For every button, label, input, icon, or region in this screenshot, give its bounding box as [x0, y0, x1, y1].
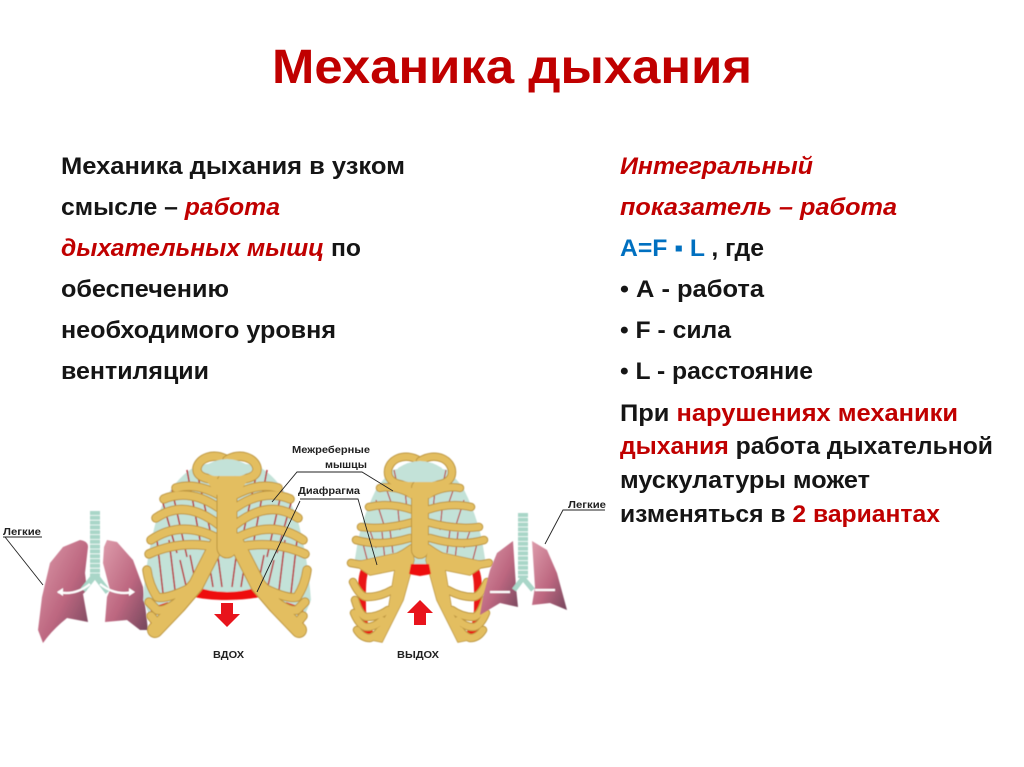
label: intercostal muscles: мышцы: [325, 460, 367, 471]
text block: integral indicator and formula: [620, 153, 897, 385]
leader lines: [3, 472, 605, 592]
label: inhale: ВДОХ: [213, 650, 244, 661]
arrow: diaphragm moves up: [407, 600, 433, 625]
label: lungs left: Легкие: [3, 527, 41, 538]
illustration: inhale lungs: [38, 511, 148, 643]
text block: integral indicator and formula: • F - сила: [620, 317, 732, 344]
text block: left definition: обеспечению: [61, 276, 229, 303]
text block: mechanics disorders: [620, 400, 993, 528]
text block: mechanics disorders: дыхания работа дыхательной: [620, 433, 993, 460]
text block: integral indicator and formula: A=F ▪ L , где: [620, 235, 764, 262]
illustration: inhale rib cage: [143, 456, 311, 630]
text block: integral indicator and formula: Интегральный: [620, 153, 813, 180]
text block: left definition: дыхательных мышц по: [61, 235, 361, 262]
text block: integral indicator and formula: • А - работа: [620, 276, 765, 303]
label: lungs right: Легкие: [568, 500, 606, 511]
label: diaphragm: Диафрагма: [298, 485, 360, 497]
text block: mechanics disorders: мускулатуры может: [620, 467, 870, 494]
label: intercostal muscles: Межреберные: [292, 444, 370, 456]
text block: integral indicator and formula: • L - расстояние: [620, 358, 813, 385]
arrow: diaphragm moves down: [214, 603, 240, 627]
illustration: exhale lungs: [480, 513, 567, 615]
title: Механика дыхания: [272, 41, 752, 94]
text block: left definition: необходимого уровня: [61, 317, 336, 344]
label: exhale: ВЫДОХ: [397, 650, 439, 661]
label: intercostal muscles: [292, 444, 370, 471]
text block: mechanics disorders: изменяться в 2 вариантах: [620, 501, 941, 528]
diagram: breathing mechanics: [3, 444, 606, 661]
text block: left definition: [61, 153, 405, 385]
text block: left definition: вентиляции: [61, 358, 209, 385]
text block: mechanics disorders: При нарушениях механики: [620, 400, 958, 427]
text block: left definition: смысле – работа: [61, 194, 280, 221]
text block: integral indicator and formula: показатель – работа: [620, 194, 897, 221]
illustration: exhale rib cage: [351, 457, 489, 642]
text block: left definition: Механика дыхания в узком: [61, 153, 405, 180]
